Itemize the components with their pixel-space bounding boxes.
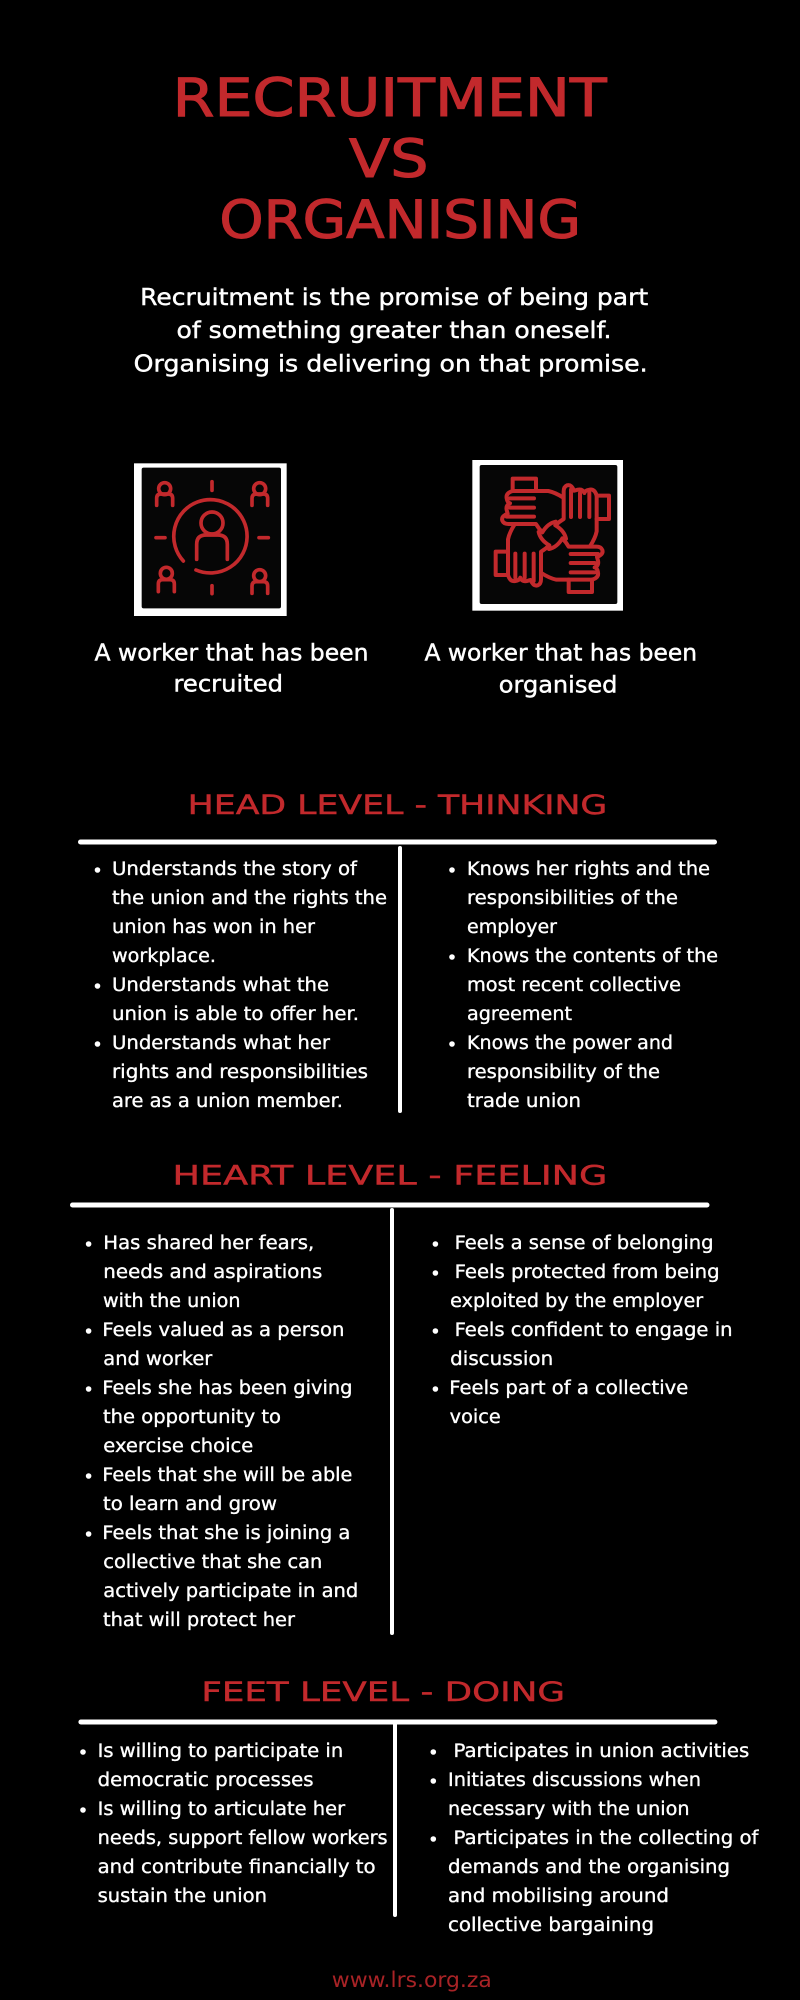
- text: head level organised: agreement: [467, 1004, 572, 1025]
- heading: heart level: HEART LEVEL - FEELING: [172, 1160, 607, 1192]
- title: ORGANISING: [219, 190, 581, 251]
- text: head level recruited: are as a union member.: [112, 1091, 343, 1112]
- caption: organised: organised: [499, 672, 617, 698]
- text: heart level recruited: actively participate in and: [103, 1581, 358, 1602]
- text: heart level recruited: to learn and grow: [103, 1494, 277, 1515]
- caption: organised: [424, 640, 697, 698]
- text: heart level recruited: Feels she has been giving: [102, 1378, 352, 1399]
- text: heart level organised: Feels confident to engage in: [455, 1320, 733, 1341]
- text: feet level recruited: [80, 1741, 388, 1907]
- text: heart level organised: discussion: [450, 1349, 553, 1370]
- panel: feet level: [78, 1720, 759, 1936]
- text: feet level recruited: Is willing to participate in: [98, 1741, 343, 1762]
- text: head level recruited: rights and responsibilities: [112, 1062, 368, 1083]
- panel: heart level: [70, 1202, 733, 1635]
- text: heart level organised: voice: [450, 1407, 501, 1428]
- text: heart level recruited: and worker: [103, 1349, 213, 1370]
- text: heart level organised: exploited by the employer: [450, 1291, 704, 1312]
- text: heart level recruited: needs and aspirations: [103, 1262, 322, 1283]
- text: heart level recruited: collective that she can: [103, 1552, 322, 1573]
- text: head level organised: responsibilities of the: [467, 888, 678, 909]
- text: head level organised: trade union: [467, 1091, 581, 1112]
- heading: head level: HEAD LEVEL - THINKING: [188, 790, 607, 821]
- text: feet level organised: Initiates discussions when: [448, 1770, 701, 1791]
- caption: recruited: recruited: [174, 672, 283, 698]
- text: feet level recruited: Is willing to articulate her: [98, 1799, 346, 1820]
- text: head level organised: Knows the power and: [467, 1033, 673, 1054]
- text: head level organised: [449, 859, 718, 1112]
- icon: recruited worker: [134, 463, 287, 616]
- text: heart level organised: Feels part of a collective: [449, 1378, 688, 1399]
- intro text: Organising is delivering on that promise.: [134, 352, 648, 378]
- text: feet level organised: collective bargaining: [448, 1915, 654, 1936]
- text: feet level recruited: needs, support fellow workers: [98, 1828, 388, 1849]
- text: heart level recruited: [86, 1233, 358, 1631]
- text: heart level recruited: Feels that she will be able: [102, 1465, 352, 1486]
- title: VS: [349, 129, 428, 190]
- text: feet level organised: necessary with the union: [448, 1799, 690, 1820]
- text: heart level organised: [433, 1233, 733, 1428]
- text: head level recruited: Understands what her: [112, 1033, 330, 1054]
- text: heart level recruited: the opportunity to: [103, 1407, 281, 1428]
- icon: organised worker: [472, 460, 623, 611]
- text: head level recruited: the union and the rights the: [112, 888, 387, 909]
- caption: recruited: A worker that has been: [94, 640, 368, 666]
- text: feet level organised: Participates in the collecting of: [454, 1828, 759, 1849]
- text: feet level organised: and mobilising around: [448, 1886, 669, 1907]
- text: head level recruited: Understands what the: [112, 975, 329, 996]
- text: heart level recruited: Feels valued as a person: [102, 1320, 344, 1341]
- text: heart level organised: Feels a sense of belonging: [455, 1233, 714, 1254]
- intro text: of something greater than oneself.: [176, 318, 612, 344]
- text: head level recruited: union is able to offer her.: [112, 1004, 359, 1025]
- panel: head level: [78, 840, 718, 1113]
- text: feet level organised: [430, 1741, 759, 1936]
- text: head level recruited: workplace.: [112, 946, 216, 967]
- heading: feet level: FEET LEVEL - DOING: [201, 1677, 565, 1708]
- text: heart level recruited: Feels that she is joining a: [102, 1523, 350, 1544]
- text: heart level organised: Feels protected from being: [455, 1262, 720, 1283]
- text: head level recruited: union has won in her: [112, 917, 315, 938]
- intro text: [134, 285, 648, 378]
- text: feet level recruited: and contribute financially to: [98, 1857, 376, 1878]
- text: heart level recruited: that will protect her: [103, 1610, 295, 1631]
- text: head level organised: employer: [467, 917, 557, 938]
- footer url: www.lrs.org.za: [332, 1968, 492, 1993]
- text: head level recruited: Understands the story of: [112, 859, 358, 880]
- text: head level organised: responsibility of the: [467, 1062, 660, 1083]
- text: heart level recruited: Has shared her fears,: [103, 1233, 314, 1254]
- intro text: Recruitment is the promise of being part: [140, 285, 648, 311]
- caption: organised: A worker that has been: [424, 640, 697, 666]
- title: RECRUITMENT: [173, 68, 607, 129]
- text: head level recruited: [95, 859, 387, 1112]
- title: [173, 68, 607, 251]
- text: head level organised: most recent collective: [467, 975, 681, 996]
- caption: recruited: [94, 640, 368, 698]
- text: feet level organised: demands and the organising: [448, 1857, 730, 1878]
- text: head level organised: Knows the contents of the: [467, 946, 718, 967]
- text: feet level organised: Participates in union activities: [454, 1741, 749, 1762]
- text: heart level recruited: with the union: [103, 1291, 240, 1312]
- text: head level organised: Knows her rights and the: [467, 859, 710, 880]
- text: feet level recruited: sustain the union: [98, 1886, 267, 1907]
- text: heart level recruited: exercise choice: [103, 1436, 253, 1457]
- text: feet level recruited: democratic processes: [98, 1770, 314, 1791]
